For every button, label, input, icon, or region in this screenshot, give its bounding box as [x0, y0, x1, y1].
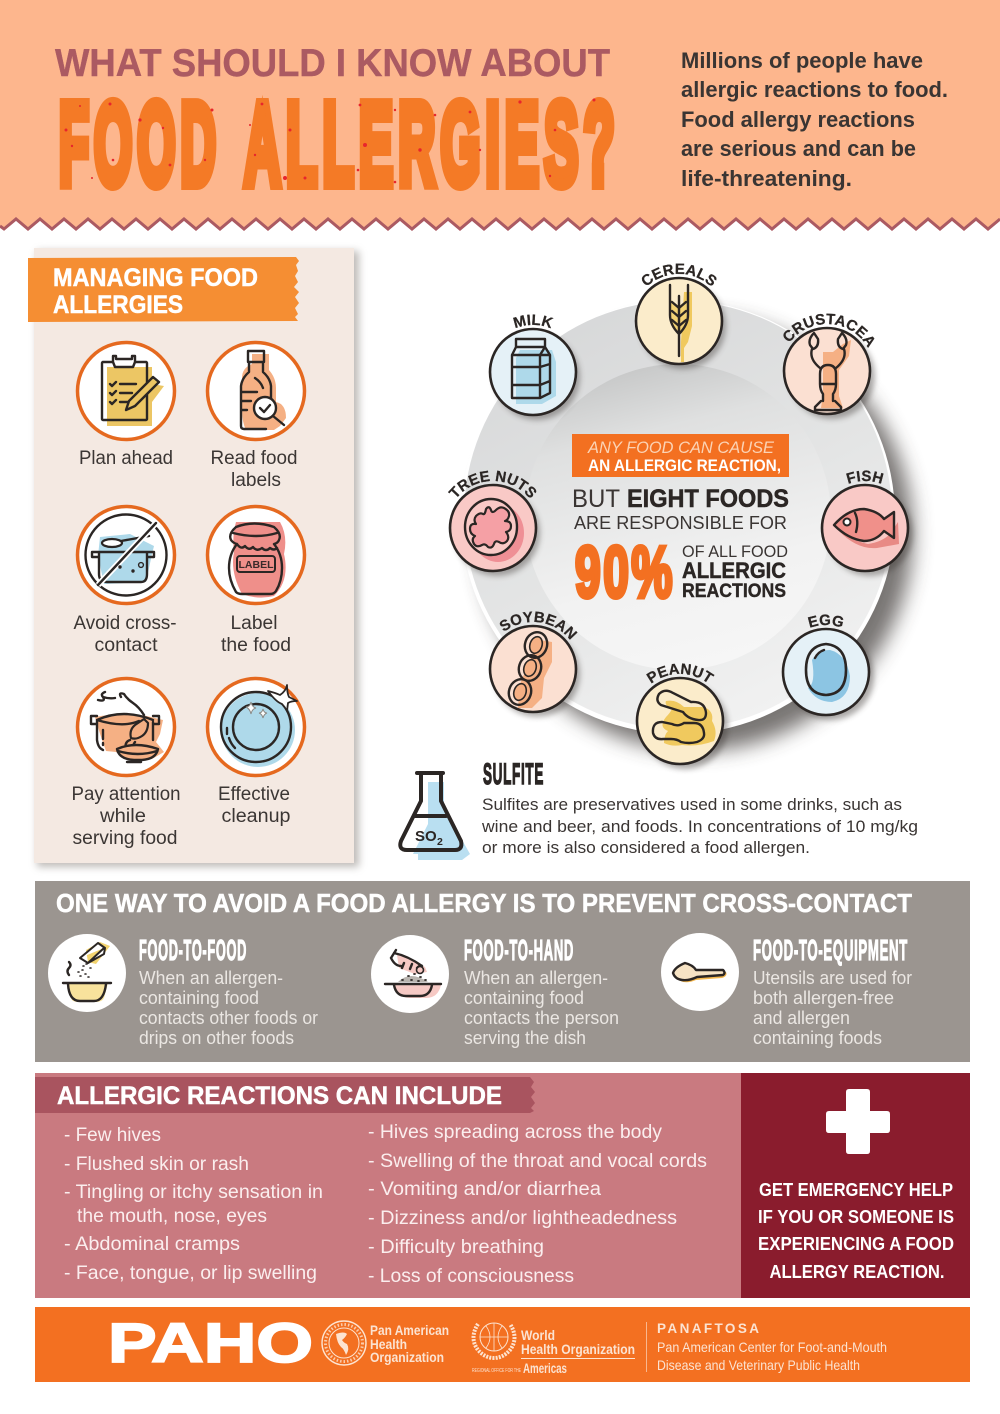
caption: label the food: Label	[230, 613, 278, 634]
icon: label the food jar	[208, 506, 304, 604]
footer	[35, 1307, 970, 1382]
caption: pay attention while serving food: serving food	[72, 828, 178, 849]
sulfite text: wine and beer, and foods. In concentrations of 10 mg/kg	[481, 817, 918, 836]
intro text: life-threatening.	[681, 166, 852, 191]
reactions list right: - Difficulty breathing	[368, 1237, 544, 1258]
icon: peanut	[636, 663, 724, 766]
panel: cross-contact	[35, 881, 970, 1062]
sulfite text: or more is also considered a food allergen.	[482, 838, 810, 857]
central message: AN ALLERGIC REACTION,	[588, 456, 781, 475]
WHO name: World	[521, 1327, 555, 1343]
food circle shadows	[454, 283, 913, 769]
icon: peanut: PEANUT	[646, 663, 714, 684]
caption: pay attention while serving food: while	[99, 806, 146, 827]
food to equipment text: both allergen-free	[753, 988, 894, 1008]
reactions list right: - Dizziness and/or lightheadedness	[368, 1208, 677, 1229]
icon: crustacea: CRUSTACEA	[783, 314, 874, 348]
WHO emblem	[474, 1323, 514, 1358]
icon: plan ahead clipboard	[78, 342, 174, 440]
emergency text: IF YOU OR SOMEONE IS	[758, 1206, 954, 1227]
food to food text: containing food	[139, 988, 259, 1008]
sulfite flask icon	[400, 773, 470, 860]
icon: milk: MILK	[513, 314, 554, 328]
reactions heading banner: ALLERGIC REACTIONS CAN INCLUDE	[57, 1082, 502, 1110]
food to food text	[139, 935, 318, 1048]
WHO name: Americas	[523, 1360, 567, 1376]
panel: emergency help	[741, 1073, 970, 1298]
food to equipment text: and allergen	[753, 1008, 850, 1028]
reactions list left: the mouth, nose, eyes	[77, 1206, 267, 1227]
food to equipment text	[753, 935, 912, 1048]
reactions list left	[64, 1125, 323, 1284]
caption: label the food: the food	[221, 635, 291, 656]
central message: OF ALL FOOD	[682, 542, 788, 561]
caption: read food labels: Read food	[210, 448, 298, 469]
food to hand text: FOOD-TO-HAND	[464, 935, 574, 967]
reactions list right: - Loss of consciousness	[368, 1266, 574, 1287]
intro text: allergic reactions to food.	[681, 77, 948, 102]
plate shadow	[479, 317, 913, 751]
icon: food to food	[48, 934, 126, 1012]
PANAFTOSA name: Pan American Center for Foot-and-Mouth	[657, 1339, 887, 1355]
icon: food to equipment spoon	[661, 933, 739, 1011]
caption: effective cleanup	[218, 784, 290, 827]
sulfite text	[481, 758, 918, 857]
icon: pay attention pot and bowl	[78, 678, 174, 776]
PAHO wordmark: PAHO	[108, 1311, 313, 1374]
food to food text: drips on other foods	[139, 1028, 294, 1048]
emergency text	[758, 1179, 954, 1282]
PAHO name: Health	[370, 1336, 407, 1352]
plate	[461, 300, 895, 734]
reactions list right: - Swelling of the throat and vocal cords	[368, 1151, 707, 1172]
panel heading banner	[28, 257, 299, 322]
caption: avoid cross-contact: Avoid cross-	[74, 613, 176, 634]
central message: ANY FOOD CAN CAUSE	[587, 438, 775, 457]
panel: managing food allergies	[28, 248, 359, 867]
food to equipment text: Utensils are used for	[753, 968, 912, 988]
caption: read food labels: labels	[231, 470, 281, 491]
caption: effective cleanup: cleanup	[222, 806, 290, 827]
central message: REACTIONS	[682, 581, 786, 602]
food to hand text: containing food	[464, 988, 584, 1008]
icon: egg: EGG	[808, 614, 844, 628]
plate with eight foods	[448, 264, 928, 772]
emergency text: ALLERGY REACTION.	[770, 1261, 944, 1282]
WHO name: REGIONAL OFFICE FOR THE	[472, 1368, 521, 1374]
PANAFTOSA name	[657, 1321, 887, 1373]
icon: fish: FISH	[846, 470, 884, 484]
reactions list left: - Few hives	[64, 1125, 161, 1146]
panel heading banner: MANAGING FOOD	[53, 264, 258, 292]
icon: medical cross	[826, 1089, 890, 1154]
food to hand text	[464, 935, 619, 1048]
food to hand text: When an allergen-	[464, 968, 608, 988]
caption: avoid cross-contact	[74, 613, 176, 656]
PAHO name: Pan American	[370, 1322, 449, 1338]
reactions list left: - Flushed skin or rash	[64, 1154, 249, 1175]
icon: soybean	[488, 611, 578, 714]
PANAFTOSA name: Disease and Veterinary Public Health	[657, 1357, 860, 1373]
intro text	[681, 48, 948, 191]
emergency text: GET EMERGENCY HELP	[759, 1179, 953, 1200]
central message: ARE RESPONSIBLE FOR	[574, 513, 787, 533]
PANAFTOSA name: PANAFTOSA	[657, 1321, 759, 1336]
title: what should I know about: WHAT SHOULD I KNOW ABOUT	[55, 42, 610, 85]
icon: milk	[488, 314, 578, 416]
intro text: Food allergy reactions	[681, 107, 915, 132]
icon: food to hand	[371, 935, 449, 1013]
icon: soybean: SOYBEAN	[500, 611, 578, 640]
food to food text: When an allergen-	[139, 968, 283, 988]
header band	[0, 0, 1000, 229]
cross-contact heading: ONE WAY TO AVOID A FOOD ALLERGY IS TO PREVENT CROSS-CONTACT	[56, 888, 912, 918]
reactions list left: - Face, tongue, or lip swelling	[64, 1263, 317, 1284]
icon: cereals: CEREALS	[642, 264, 716, 286]
reactions list left: - Tingling or itchy sensation in	[64, 1182, 323, 1203]
icon: effective cleanup plate	[208, 678, 304, 776]
food to food text: contacts other foods or	[139, 1008, 318, 1028]
sulfite flask icon: 2	[437, 836, 443, 848]
PAHO name	[370, 1322, 449, 1365]
reactions list right: - Hives spreading across the body	[368, 1122, 663, 1143]
WHO name: Health Organization	[521, 1341, 635, 1357]
food to hand text: serving the dish	[464, 1028, 586, 1048]
emergency text: EXPERIENCING A FOOD	[758, 1233, 954, 1254]
central message	[572, 434, 789, 613]
icon: tree nuts	[448, 470, 538, 572]
sulfite text: Sulfites are preservatives used in some drinks, such as	[482, 795, 902, 814]
reactions list right	[368, 1122, 707, 1287]
sulfite text: SULFITE	[483, 758, 544, 791]
PAHO name: Organization	[370, 1349, 444, 1365]
intro text: are serious and can be	[681, 136, 916, 161]
title: food allergies	[59, 79, 620, 209]
panel heading banner: ALLERGIES	[53, 291, 183, 319]
central message: EIGHT FOODS	[627, 485, 789, 513]
icon: label the food jar: LABEL	[238, 559, 274, 571]
caption: plan ahead: Plan ahead	[79, 448, 173, 469]
food to hand text: contacts the person	[464, 1008, 619, 1028]
food to food text: FOOD-TO-FOOD	[139, 935, 247, 967]
icon: avoid cross-contact pot	[78, 506, 174, 604]
central message: BUT	[572, 485, 620, 513]
caption: read food labels	[210, 448, 298, 491]
icon: cereals	[634, 264, 724, 366]
sulfite flask icon: SO	[415, 828, 437, 845]
caption: pay attention while serving food	[72, 784, 180, 849]
icon: crustacea	[782, 314, 874, 416]
icon: egg	[782, 614, 870, 716]
panel: allergic reactions	[35, 1073, 741, 1298]
food to equipment text: containing foods	[753, 1028, 882, 1048]
intro text: Millions of people have	[681, 48, 923, 73]
icon: read food labels bottle	[208, 342, 304, 440]
caption: effective cleanup: Effective	[218, 784, 290, 805]
PAHO emblem	[322, 1321, 366, 1365]
icon: tree nuts: TREE NUTS	[448, 470, 536, 498]
title: food allergies: FOOD	[59, 79, 221, 209]
central message: ALLERGIC	[682, 558, 786, 583]
central message: 90%	[575, 533, 675, 613]
caption: pay attention while serving food: Pay attention	[72, 784, 180, 805]
reactions list left: - Abdominal cramps	[64, 1234, 240, 1255]
caption: avoid cross-contact: contact	[94, 635, 158, 656]
icon: fish	[820, 470, 910, 572]
caption: label the food	[221, 613, 291, 656]
WHO name	[472, 1327, 635, 1376]
reactions list right: - Vomiting and/or diarrhea	[368, 1179, 601, 1200]
